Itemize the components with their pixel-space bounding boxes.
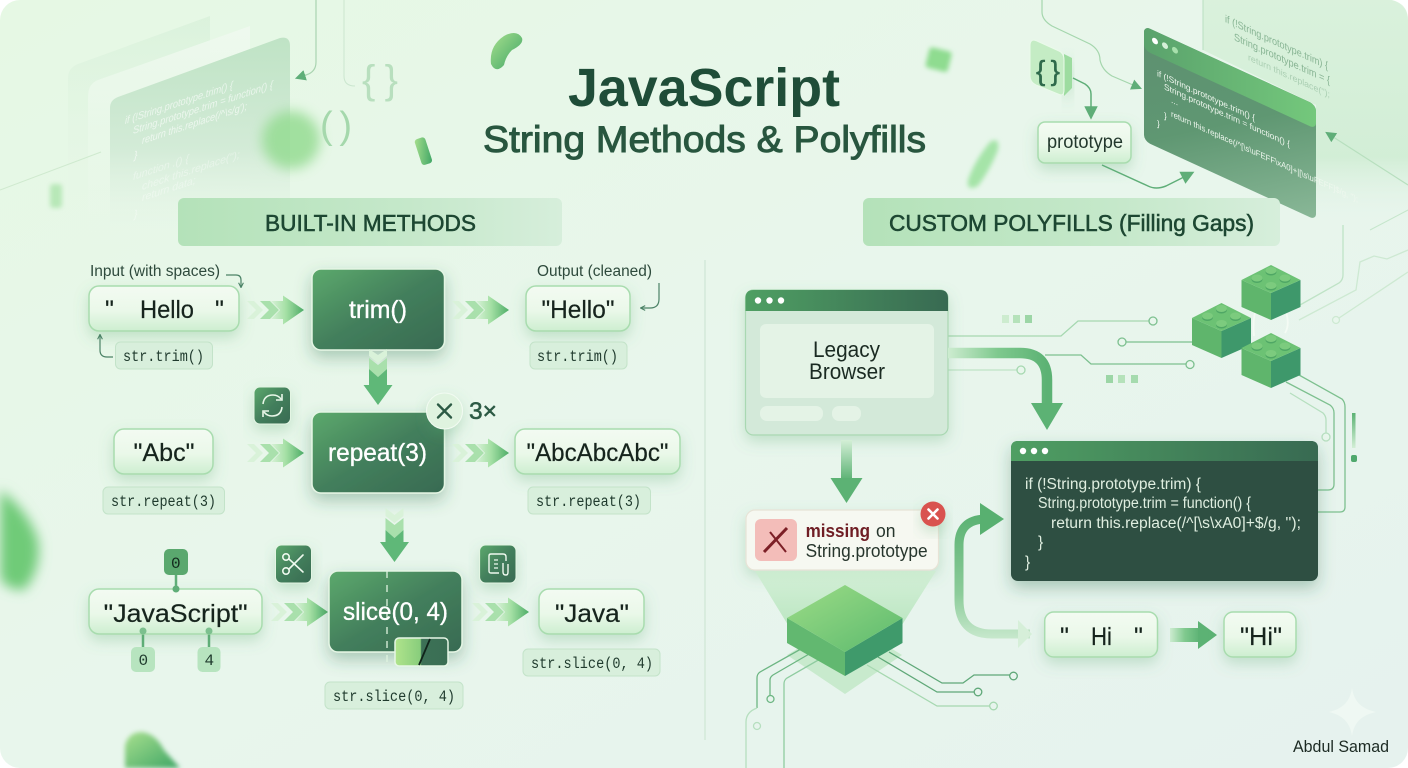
code chip: str.slice(0, 4) xyxy=(333,688,455,706)
code chip: str.repeat(3) xyxy=(536,493,641,511)
decoration: top-left ghost code panels: if (!String.prototype.trim() { xyxy=(125,79,234,127)
polyfill code block xyxy=(1011,441,1318,581)
section heading: built-in methods: BUILT-IN METHODS xyxy=(265,210,476,236)
code chip: str.trim() xyxy=(537,348,618,366)
arrow: trim to repeat xyxy=(364,349,392,405)
isometric code window: return this.replace(/^[\s\uFEFF\xA0]+|[\s\uFEFF]$/g, ''); xyxy=(1171,109,1358,204)
input box: Hello xyxy=(140,296,194,324)
input box with index tags xyxy=(89,549,262,672)
output label xyxy=(537,263,659,308)
missing callout: missing xyxy=(806,521,870,541)
demo box: after xyxy=(1224,612,1296,657)
output box: "Java" xyxy=(555,600,629,628)
input box: " xyxy=(105,296,114,324)
input label: Input (with spaces) xyxy=(90,263,220,280)
section heading: built-in methods xyxy=(178,198,562,246)
title xyxy=(483,58,926,160)
decoration: top-left ghost code panels xyxy=(0,16,290,250)
circuit lines: browser to bricks xyxy=(948,225,1408,512)
icon: document clip xyxy=(480,545,516,583)
decoration: top-left ghost code panels: } xyxy=(133,208,138,221)
code chip xyxy=(116,342,212,369)
arrow: browser to code xyxy=(948,353,1063,430)
arrow xyxy=(247,438,304,468)
title: JavaScript xyxy=(568,58,840,118)
arrow: repeat to slice xyxy=(380,508,409,562)
icon: scissors xyxy=(276,545,312,583)
panel: trim row xyxy=(89,263,659,369)
code chip: str.trim() xyxy=(123,348,204,366)
icon: broken tools xyxy=(755,519,797,561)
polyfill code block: return this.replace(/^[\s\xA0]+$/g, ''); xyxy=(1051,515,1301,532)
code chip: str.repeat(3) xyxy=(111,493,216,511)
decoration: top-left ghost code panels: function .() { xyxy=(133,152,190,183)
output box xyxy=(526,286,630,331)
top-right ghost code panel xyxy=(1203,0,1408,230)
arrow xyxy=(472,598,529,626)
decoration: top-left brackets and connectors: { } xyxy=(362,58,398,102)
divider xyxy=(704,260,706,740)
method box: trim: trim() xyxy=(349,296,407,324)
input box xyxy=(89,286,239,331)
isometric code window: if (!String.prototype.trim() { xyxy=(1157,68,1255,123)
code chip xyxy=(530,342,627,369)
decoration: top-left brackets and connectors xyxy=(262,0,398,169)
method box: trim xyxy=(312,269,444,350)
prototype box xyxy=(1038,122,1131,163)
icon: repeat xyxy=(254,387,290,424)
method box: slice: slice(0, 4) xyxy=(343,598,448,626)
icon: curly braces tile: { } xyxy=(1036,55,1060,86)
demo box: before: Hi xyxy=(1091,623,1112,651)
icon: lego bricks xyxy=(1192,265,1300,388)
arrow xyxy=(452,296,509,324)
polyfill code block: } xyxy=(1025,554,1030,571)
browser window: Browser xyxy=(809,359,885,384)
polyfill code block: } xyxy=(1038,534,1043,551)
demo box: after: "Hi" xyxy=(1240,623,1282,651)
method box: slice xyxy=(329,571,462,666)
panel: slice row xyxy=(89,545,660,709)
isometric code window: } xyxy=(1157,118,1160,129)
output box: "Hello" xyxy=(542,296,614,324)
arrow: demo xyxy=(1170,621,1217,649)
arrow xyxy=(271,598,328,626)
signature xyxy=(1293,688,1389,756)
decoration: top-left ghost code panels: } xyxy=(133,149,138,162)
input box with index tags: 0 xyxy=(171,555,181,573)
input box with index tags: "JavaScript" xyxy=(104,600,248,628)
times badge: 3× xyxy=(469,398,497,425)
polyfill code block: if (!String.prototype.trim) { xyxy=(1025,476,1201,493)
section heading: custom polyfills: CUSTOM POLYFILLS (Filling Gaps) xyxy=(889,210,1254,236)
code chip: str.slice(0, 4) xyxy=(531,655,653,673)
prototype diagram xyxy=(1030,40,1192,188)
method box: repeat: repeat(3) xyxy=(328,439,427,467)
method box: repeat xyxy=(312,412,444,493)
section heading: custom polyfills xyxy=(863,198,1280,246)
polyfill code block: String.prototype.trim = function() { xyxy=(1038,495,1251,512)
signature: Abdul Samad xyxy=(1293,738,1389,756)
times badge xyxy=(426,393,497,429)
input box: " xyxy=(215,296,224,324)
code chip xyxy=(528,487,650,514)
missing callout xyxy=(746,502,946,570)
isometric code window xyxy=(1042,0,1358,239)
input box: "Abc" xyxy=(134,439,194,467)
output box xyxy=(539,589,644,634)
missing callout: on xyxy=(876,521,896,541)
arrow xyxy=(452,438,509,468)
demo box: before xyxy=(1045,612,1158,657)
demo box: before: " xyxy=(1134,623,1143,651)
top-right ghost code panel: if (!String.prototype.trim) { xyxy=(1225,13,1328,72)
decoration: top-left ghost code panels: String.prototype.trim = function() { xyxy=(133,79,274,137)
top-right ghost code panel: return this.replace(''); xyxy=(1248,52,1330,101)
isometric base block xyxy=(746,571,1017,768)
browser window: Legacy xyxy=(813,337,880,362)
code chip xyxy=(325,682,463,709)
code chip xyxy=(523,649,660,676)
decoration: top-left ghost code panels: return data; xyxy=(142,175,196,204)
output box: "AbcAbcAbc" xyxy=(526,439,668,467)
demo box: before: " xyxy=(1060,623,1069,651)
code chip xyxy=(103,487,224,514)
decoration: top-left ghost code panels: return this.replace(/^\s/g'); xyxy=(142,101,247,147)
arrow xyxy=(247,296,304,324)
arrow: browser to missing xyxy=(830,440,862,503)
input label xyxy=(90,263,241,287)
isometric code window: String.prototype.trim = function() { xyxy=(1164,82,1290,149)
title: String Methods & Polyfills xyxy=(483,119,926,160)
panel: legacy browser flow xyxy=(746,225,1408,768)
isometric code window: } xyxy=(1164,111,1167,121)
output label: Output (cleaned) xyxy=(537,263,652,280)
decoration: top-left brackets and connectors: ( ) xyxy=(320,105,352,147)
decoration: floating green shapes xyxy=(0,33,998,768)
icon: curly braces tile xyxy=(1030,40,1072,96)
pixel dots xyxy=(1002,315,1357,462)
curved arrow: output to code and demo xyxy=(959,503,1032,648)
input box with index tags: 4 xyxy=(204,652,214,670)
input box with index tags: 0 xyxy=(138,652,148,670)
output box xyxy=(515,429,680,474)
decoration: top-left ghost code panels: check this.replace(''); xyxy=(142,149,240,193)
input box xyxy=(114,429,213,474)
missing callout: String.prototype xyxy=(806,541,928,561)
top-right ghost code panel: String.prototype.trim = { xyxy=(1234,31,1330,87)
isometric code window: ... xyxy=(1171,95,1178,108)
prototype box: prototype xyxy=(1047,132,1123,153)
browser window xyxy=(746,290,948,435)
panel: repeat row xyxy=(103,387,680,514)
